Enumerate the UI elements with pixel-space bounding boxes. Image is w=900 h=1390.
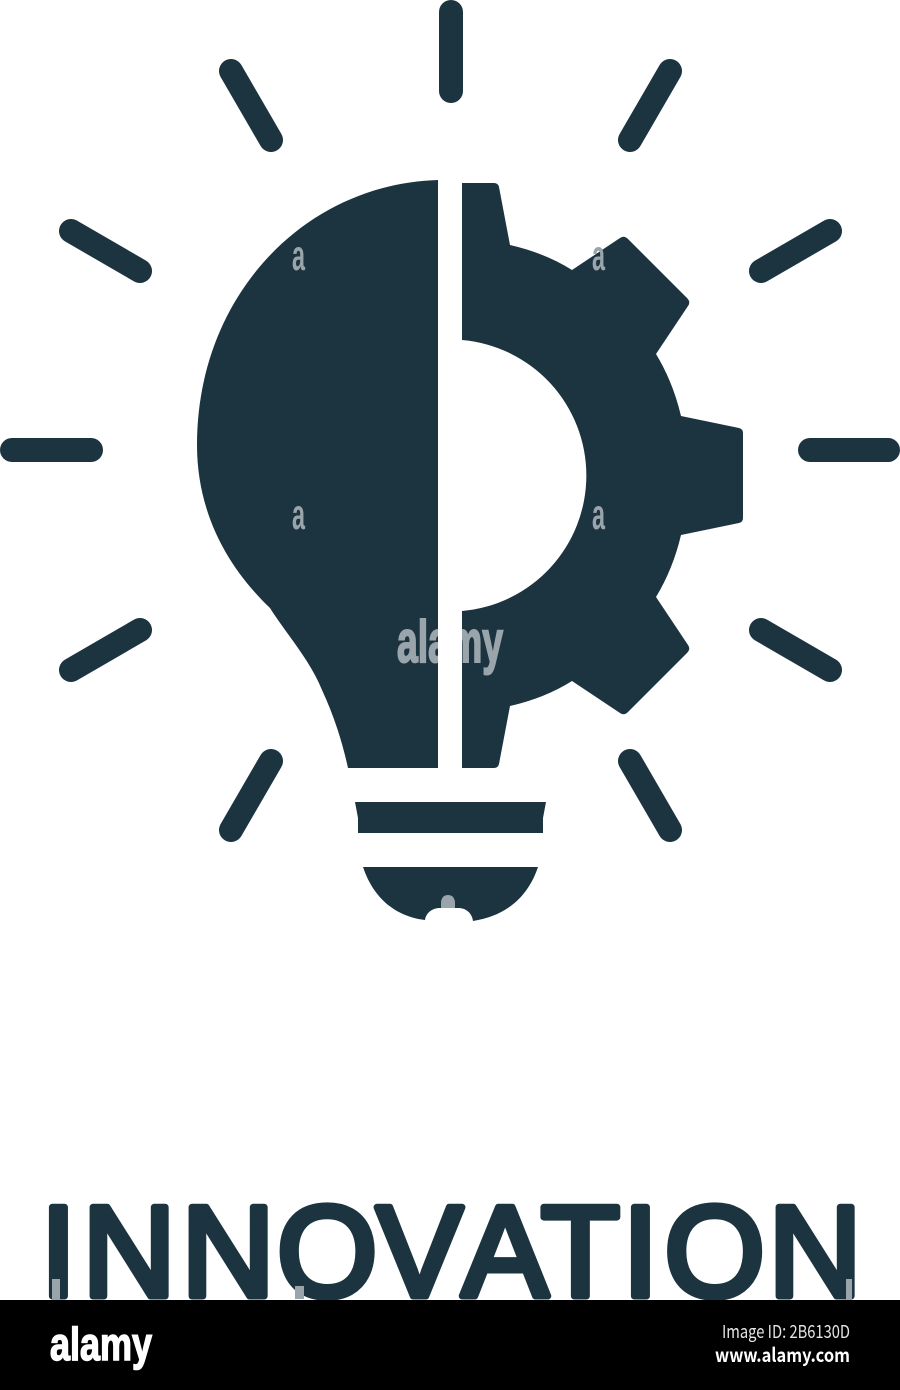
website: www.alamy.com <box>715 1341 850 1368</box>
watermark: marks on title <box>52 1279 852 1300</box>
icon: half gear <box>462 183 743 768</box>
footer logo: alamy <box>50 1318 152 1370</box>
gap between bulb and gear <box>438 600 462 690</box>
icon: bulb base collar <box>355 802 546 833</box>
watermark: alamy center: alamy <box>397 609 503 675</box>
watermark: small marks: a <box>592 491 606 539</box>
icon: half light bulb <box>197 180 438 768</box>
watermark: small marks <box>292 232 606 908</box>
title: INNOVATION <box>40 1180 862 1324</box>
footer bar <box>0 1300 900 1390</box>
image id: Image ID: 2B6130D <box>722 1318 850 1344</box>
icon: light rays <box>12 12 888 830</box>
watermark: small marks: a <box>292 232 306 280</box>
watermark: small marks: a <box>592 232 606 280</box>
icon: bulb base tip <box>363 867 538 921</box>
watermark: small marks: a <box>292 491 306 539</box>
